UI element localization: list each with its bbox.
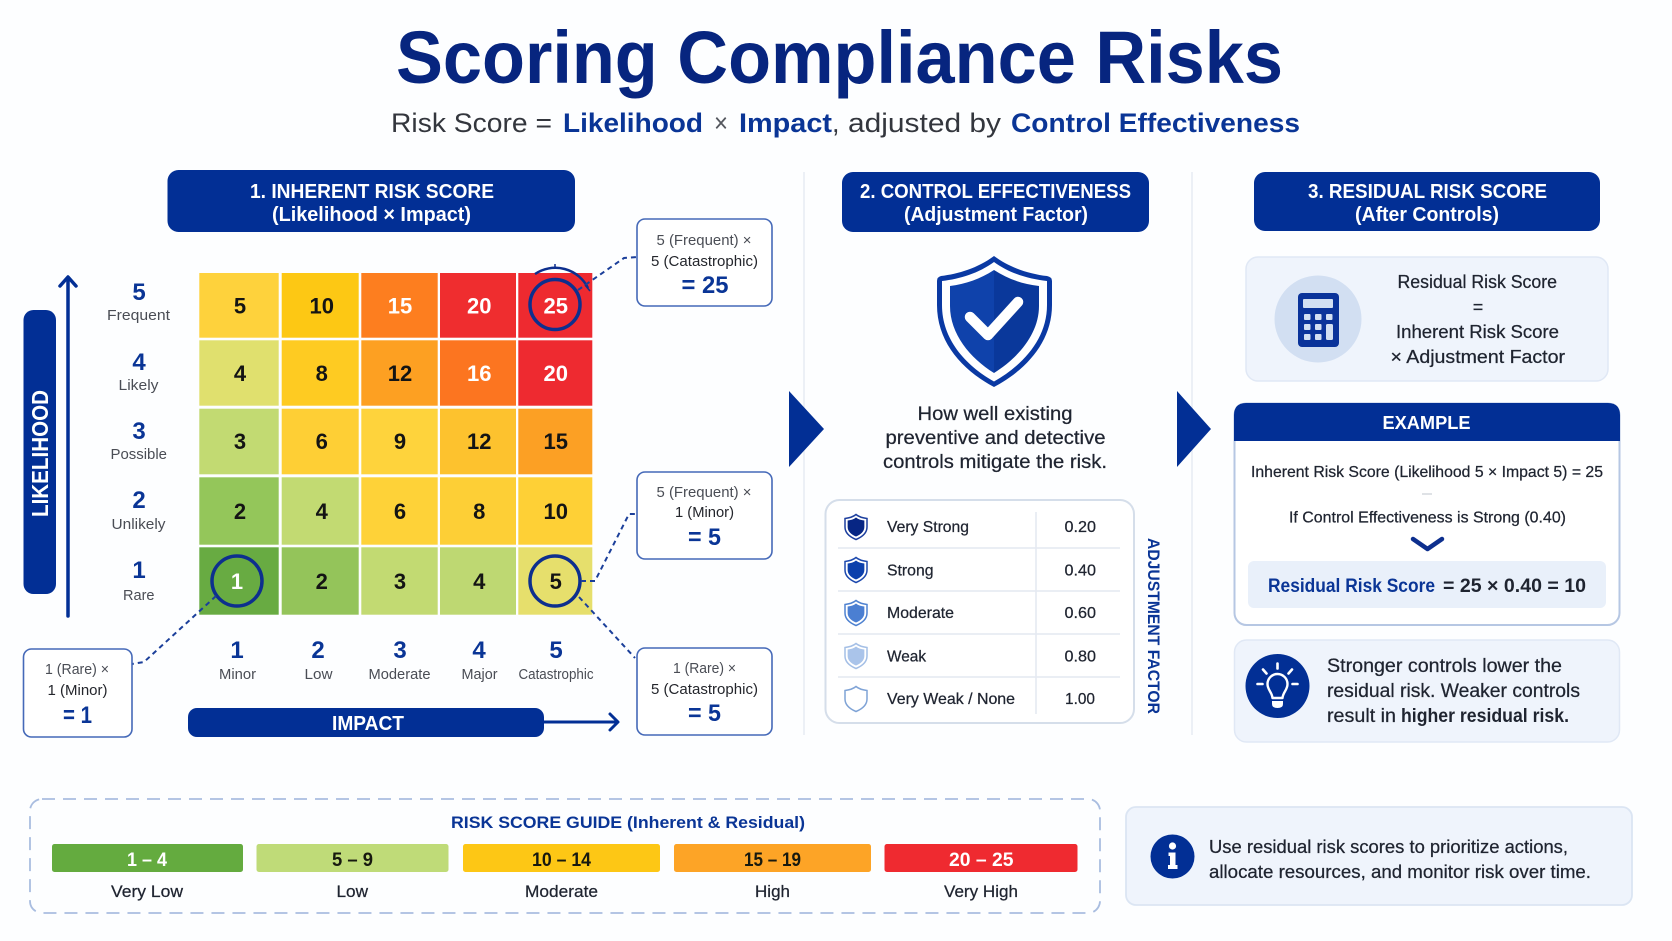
row: strong: 0.40 bbox=[1064, 562, 1096, 580]
row: weak: 0.80 bbox=[1064, 648, 1096, 666]
panel: adjustment factor table bbox=[826, 500, 1134, 723]
row: very strong: 0.20 bbox=[1064, 519, 1096, 536]
highlight circles on matrix bbox=[212, 264, 590, 606]
axis label: impact: IMPACT bbox=[332, 713, 404, 735]
heading: residual risk score: (After Controls) bbox=[1355, 204, 1499, 226]
impact scale labels: Low bbox=[304, 667, 333, 683]
formula text bbox=[1390, 272, 1565, 367]
band: very high bbox=[884, 844, 1078, 901]
arrow: likelihood axis bbox=[60, 277, 76, 616]
subtitle: adjusted by bbox=[848, 108, 1002, 138]
row: moderate: 0.60 bbox=[1064, 605, 1096, 622]
panel: example: Inherent Risk Score (Likelihood 5 × Impact 5) = 25 bbox=[1251, 464, 1603, 481]
likelihood scale labels: 1 bbox=[132, 557, 146, 584]
likelihood scale labels: Rare bbox=[123, 587, 154, 604]
impact scale labels: 5 bbox=[549, 637, 563, 664]
heading: inherent risk score: 1. INHERENT RISK SCORE bbox=[250, 181, 494, 203]
callout: 25: = 25 bbox=[682, 272, 728, 299]
control effectiveness description: preventive and detective bbox=[886, 428, 1106, 449]
result row bbox=[1248, 561, 1606, 608]
callout: 25 bbox=[637, 219, 772, 306]
row: very weak bbox=[845, 686, 1095, 712]
callout: 1: = 1 bbox=[63, 702, 92, 729]
band: moderate bbox=[463, 844, 660, 901]
likelihood scale labels: 3 bbox=[132, 418, 146, 445]
control effectiveness description bbox=[883, 404, 1107, 473]
panel: example bbox=[1234, 403, 1620, 625]
tip text: result in bbox=[1327, 706, 1396, 727]
risk matrix heat map: 10 bbox=[309, 294, 334, 318]
risk matrix heat map: 15 bbox=[543, 429, 568, 454]
axis label: likelihood bbox=[24, 310, 56, 594]
heading: inherent risk score bbox=[168, 170, 575, 232]
risk matrix heat map: 20 bbox=[543, 361, 568, 386]
risk matrix heat map: 12 bbox=[467, 429, 492, 454]
impact scale labels: Moderate bbox=[368, 667, 430, 683]
risk matrix heat map: 2 bbox=[316, 569, 328, 594]
row: strong: Strong bbox=[887, 562, 934, 580]
risk matrix heat map: 6 bbox=[394, 499, 406, 524]
note text: allocate resources, and monitor risk over time. bbox=[1209, 862, 1591, 882]
likelihood scale labels: 5 bbox=[132, 279, 146, 306]
risk matrix heat map: 3 bbox=[234, 429, 246, 454]
title: Scoring Compliance Risks bbox=[396, 16, 1283, 99]
heading: control effectiveness bbox=[842, 172, 1149, 232]
subtitle bbox=[391, 108, 1300, 138]
row: weak bbox=[845, 644, 1096, 668]
callout: 1 bbox=[24, 649, 132, 737]
callout: 5 rare catastrophic: 5 (Catastrophic) bbox=[651, 682, 758, 698]
risk matrix heat map: 9 bbox=[394, 429, 406, 454]
risk matrix heat map: 25 bbox=[543, 294, 568, 318]
axis label: adjustment factor: ADJUSTMENT FACTOR bbox=[1144, 538, 1163, 714]
likelihood scale labels: Frequent bbox=[107, 307, 171, 324]
risk matrix heat map: 8 bbox=[473, 499, 485, 524]
panel: risk score guide bbox=[30, 799, 1100, 913]
panel: residual formula bbox=[1246, 257, 1608, 381]
row: very strong bbox=[845, 514, 1096, 540]
icon: light bulb bbox=[1246, 654, 1310, 718]
risk matrix heat map: 15 bbox=[388, 294, 412, 318]
risk matrix heat map: 2 bbox=[234, 499, 246, 524]
band: very low bbox=[52, 844, 243, 901]
impact scale labels: Major bbox=[462, 667, 498, 683]
heading: residual risk score: 3. RESIDUAL RISK SCORE bbox=[1308, 181, 1547, 203]
control effectiveness description: How well existing bbox=[918, 404, 1072, 425]
impact scale labels: 4 bbox=[472, 637, 486, 664]
callout: 5 frequent minor bbox=[637, 472, 772, 559]
panel: example: EXAMPLE bbox=[1382, 413, 1470, 433]
band: low: 5 – 9 bbox=[332, 850, 373, 871]
risk matrix heat map: 4 bbox=[473, 569, 486, 594]
risk matrix heat map: 4 bbox=[316, 499, 329, 524]
arrow: step 1 to step 2 bbox=[789, 391, 824, 467]
row: moderate: Moderate bbox=[887, 605, 954, 622]
callout: 1: 1 (Minor) bbox=[48, 683, 108, 699]
arrow: impact axis bbox=[544, 714, 618, 730]
result row: = 25 × 0.40 = 10 bbox=[1443, 576, 1586, 597]
icon: calculator bbox=[1274, 276, 1362, 362]
risk matrix heat map: 6 bbox=[316, 429, 328, 454]
callout: 5 frequent minor: 1 (Minor) bbox=[675, 505, 734, 521]
risk matrix heat map: 1 bbox=[231, 569, 243, 594]
band: very low: 1 – 4 bbox=[127, 850, 167, 871]
panel: insight tip bbox=[1234, 640, 1620, 742]
callout: 5 frequent minor: = 5 bbox=[688, 524, 721, 551]
callout: 5 rare catastrophic: = 5 bbox=[688, 700, 721, 727]
risk matrix heat map: 8 bbox=[316, 361, 328, 386]
likelihood scale labels: 2 bbox=[132, 487, 146, 514]
risk matrix heat map: 5 bbox=[234, 294, 246, 318]
impact scale labels: 1 bbox=[230, 637, 244, 664]
band: very high: 20 – 25 bbox=[949, 850, 1014, 871]
likelihood scale labels: 4 bbox=[132, 349, 146, 376]
callout: 5 frequent minor: 5 (Frequent) × bbox=[656, 485, 752, 501]
subtitle: Risk Score = bbox=[391, 108, 552, 138]
icon: chevron down bbox=[1413, 539, 1442, 549]
panel: usage note bbox=[1126, 807, 1632, 905]
risk matrix heat map: 5 bbox=[550, 569, 562, 594]
band: low: Low bbox=[336, 882, 369, 901]
heading: control effectiveness: (Adjustment Factor) bbox=[904, 204, 1088, 226]
dashed leader lines bbox=[132, 257, 637, 664]
control effectiveness description: controls mitigate the risk. bbox=[883, 452, 1107, 473]
risk matrix heat map: 20 bbox=[467, 294, 492, 318]
impact scale labels: 3 bbox=[393, 637, 407, 664]
callout: 25: 5 (Frequent) × bbox=[656, 233, 752, 249]
icon: shield with check bbox=[937, 256, 1052, 387]
subtitle: × bbox=[714, 108, 728, 138]
risk matrix heat map: 10 bbox=[543, 499, 568, 524]
band: moderate: 10 – 14 bbox=[532, 850, 591, 871]
formula text: × Adjustment Factor bbox=[1390, 347, 1565, 367]
axis label: impact bbox=[188, 708, 544, 737]
panel: example: If Control Effectiveness is Strong (0.40) bbox=[1289, 510, 1566, 526]
tip text bbox=[1327, 656, 1580, 727]
subtitle: Impact bbox=[739, 108, 832, 138]
impact scale labels: Catastrophic bbox=[518, 667, 594, 683]
subtitle: Likelihood bbox=[563, 108, 703, 138]
note text: Use residual risk scores to prioritize actions, bbox=[1209, 837, 1568, 857]
band: moderate: Moderate bbox=[525, 882, 598, 901]
impact scale labels bbox=[219, 637, 594, 683]
row: very weak: 1.00 bbox=[1065, 691, 1095, 708]
heading: control effectiveness: 2. CONTROL EFFECTIVENESS bbox=[860, 181, 1131, 203]
note text bbox=[1209, 837, 1591, 882]
heading: residual risk score bbox=[1254, 172, 1600, 231]
likelihood scale labels: Possible bbox=[110, 446, 167, 463]
row: very weak: Very Weak / None bbox=[887, 691, 1015, 708]
risk matrix heat map bbox=[199, 273, 592, 615]
band: very low: Very Low bbox=[111, 882, 184, 901]
tip text: higher residual risk. bbox=[1401, 706, 1569, 727]
callout: 25: 5 (Catastrophic) bbox=[651, 254, 758, 270]
guide heading: RISK SCORE GUIDE (Inherent & Residual) bbox=[451, 813, 805, 832]
risk matrix heat map: 4 bbox=[234, 361, 247, 386]
formula text: Residual Risk Score bbox=[1398, 272, 1557, 292]
band: high: High bbox=[755, 882, 790, 901]
tip text: Stronger controls lower the bbox=[1327, 656, 1562, 677]
subtitle: Control Effectiveness bbox=[1011, 108, 1300, 138]
row: weak: Weak bbox=[887, 648, 927, 666]
row: moderate bbox=[845, 600, 1096, 626]
band: high: 15 – 19 bbox=[744, 850, 801, 871]
formula text: Inherent Risk Score bbox=[1396, 322, 1559, 342]
risk matrix heat map: 3 bbox=[394, 569, 406, 594]
formula text: = bbox=[1473, 297, 1483, 317]
result row: Residual Risk Score bbox=[1268, 576, 1435, 597]
callout: 5 rare catastrophic: 1 (Rare) × bbox=[673, 661, 736, 677]
band: very high: Very High bbox=[944, 882, 1018, 901]
likelihood scale labels: Unlikely bbox=[112, 516, 166, 533]
row: strong bbox=[845, 558, 1096, 582]
icon: info bbox=[1150, 834, 1194, 878]
impact scale labels: Minor bbox=[219, 667, 256, 683]
subtitle: , bbox=[832, 108, 840, 138]
tip text: residual risk. Weaker controls bbox=[1327, 681, 1580, 702]
likelihood scale labels: Likely bbox=[118, 377, 159, 394]
section divider lines bbox=[804, 172, 1192, 735]
callout: 1: 1 (Rare) × bbox=[45, 662, 109, 678]
risk matrix heat map: 12 bbox=[388, 361, 412, 386]
band: low bbox=[256, 844, 448, 901]
arrow: step 2 to step 3 bbox=[1177, 391, 1211, 467]
axis label: likelihood: LIKELIHOOD bbox=[27, 390, 53, 517]
band: high bbox=[674, 844, 871, 901]
callout: 5 rare catastrophic bbox=[637, 648, 772, 735]
row: very strong: Very Strong bbox=[887, 519, 969, 536]
likelihood scale labels bbox=[107, 279, 171, 604]
impact scale labels: 2 bbox=[311, 637, 325, 664]
heading: inherent risk score: (Likelihood × Impact) bbox=[272, 204, 471, 226]
risk matrix heat map: 16 bbox=[467, 361, 492, 386]
